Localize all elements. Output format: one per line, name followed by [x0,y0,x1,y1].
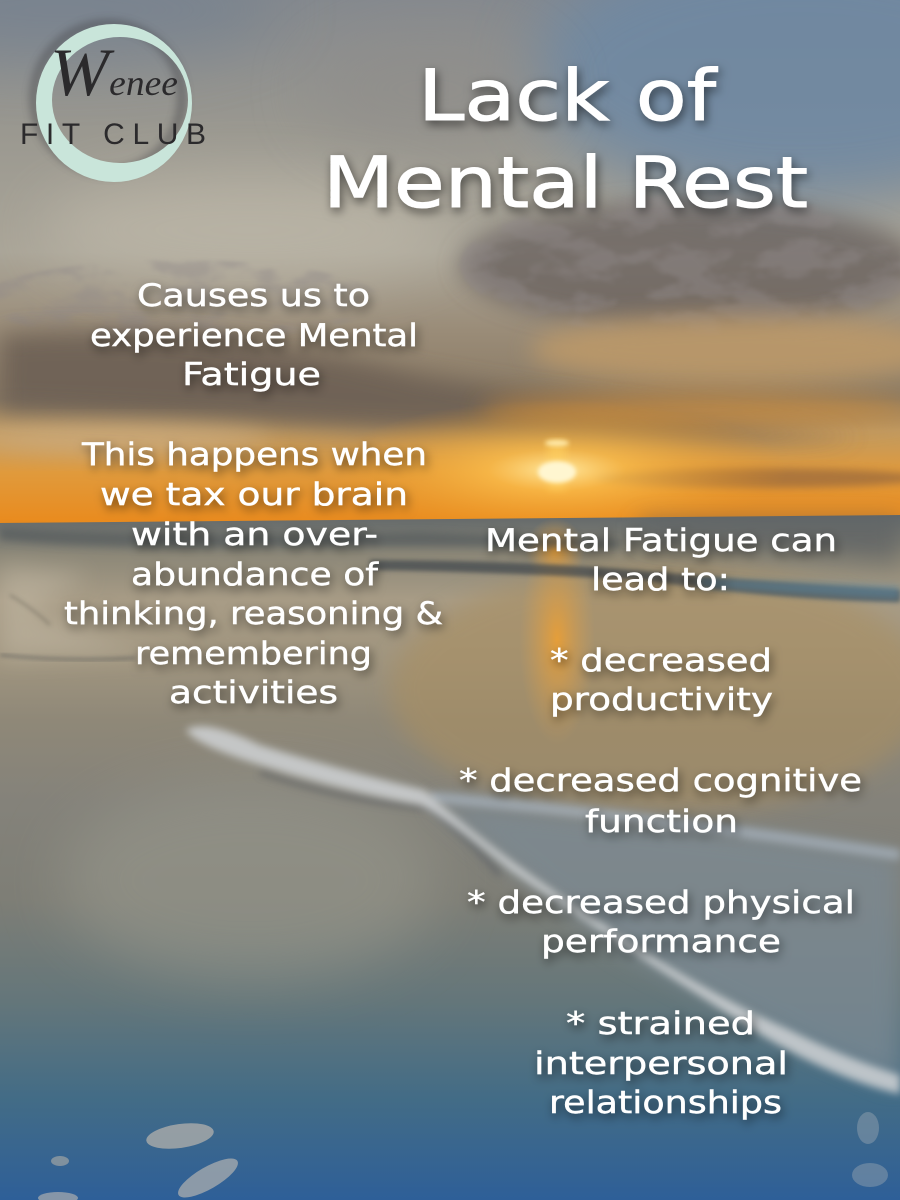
text block: effects of mental fatigue: relationships [549,1085,782,1121]
text block: causes of mental fatigue: we tax our brain [100,477,408,513]
text block: causes of mental fatigue: abundance of [131,557,379,593]
foam region [430,800,900,1085]
text block: effects of mental fatigue: lead to: [591,562,730,598]
title [323,55,808,224]
wet sand pebbles [145,1119,215,1153]
sea bands [0,528,620,548]
title: Mental Rest [323,142,808,224]
text block: causes of mental fatigue: thinking, reasoning & [64,596,443,632]
logo script: Wenee [50,34,178,110]
logo ring [36,24,192,182]
text block: effects of mental fatigue: * decreased [550,643,772,679]
text block: causes of mental fatigue [64,278,443,711]
text block: effects of mental fatigue: Mental Fatigue can [485,523,837,559]
logo ring shadow [34,24,182,172]
text block: effects of mental fatigue: performance [541,924,781,960]
text block: effects of mental fatigue [459,523,862,1121]
text block: effects of mental fatigue: interpersonal [534,1046,788,1082]
text block: causes of mental fatigue: activities [169,675,338,711]
text block: causes of mental fatigue: This happens when [81,437,427,473]
text block: effects of mental fatigue: productivity [550,682,773,718]
text block: causes of mental fatigue: with an over- [131,517,378,553]
title: Lack of [418,55,718,137]
sea foam [186,726,900,1094]
logo wordmark: FIT CLUB [20,118,206,151]
text block: effects of mental fatigue: * decreased cognitive [459,763,862,799]
text block: effects of mental fatigue: * strained [566,1006,755,1042]
text block: causes of mental fatigue: experience Mental [90,318,418,354]
text block: effects of mental fatigue: * decreased physical [467,885,855,921]
text block: effects of mental fatigue: function [585,804,738,840]
beach edge [0,565,200,660]
text block: causes of mental fatigue: Fatigue [182,357,321,393]
text block: causes of mental fatigue: Causes us to [137,278,370,314]
text block: causes of mental fatigue: remembering [135,636,372,672]
logo: Wenee Fit Club [20,24,206,182]
